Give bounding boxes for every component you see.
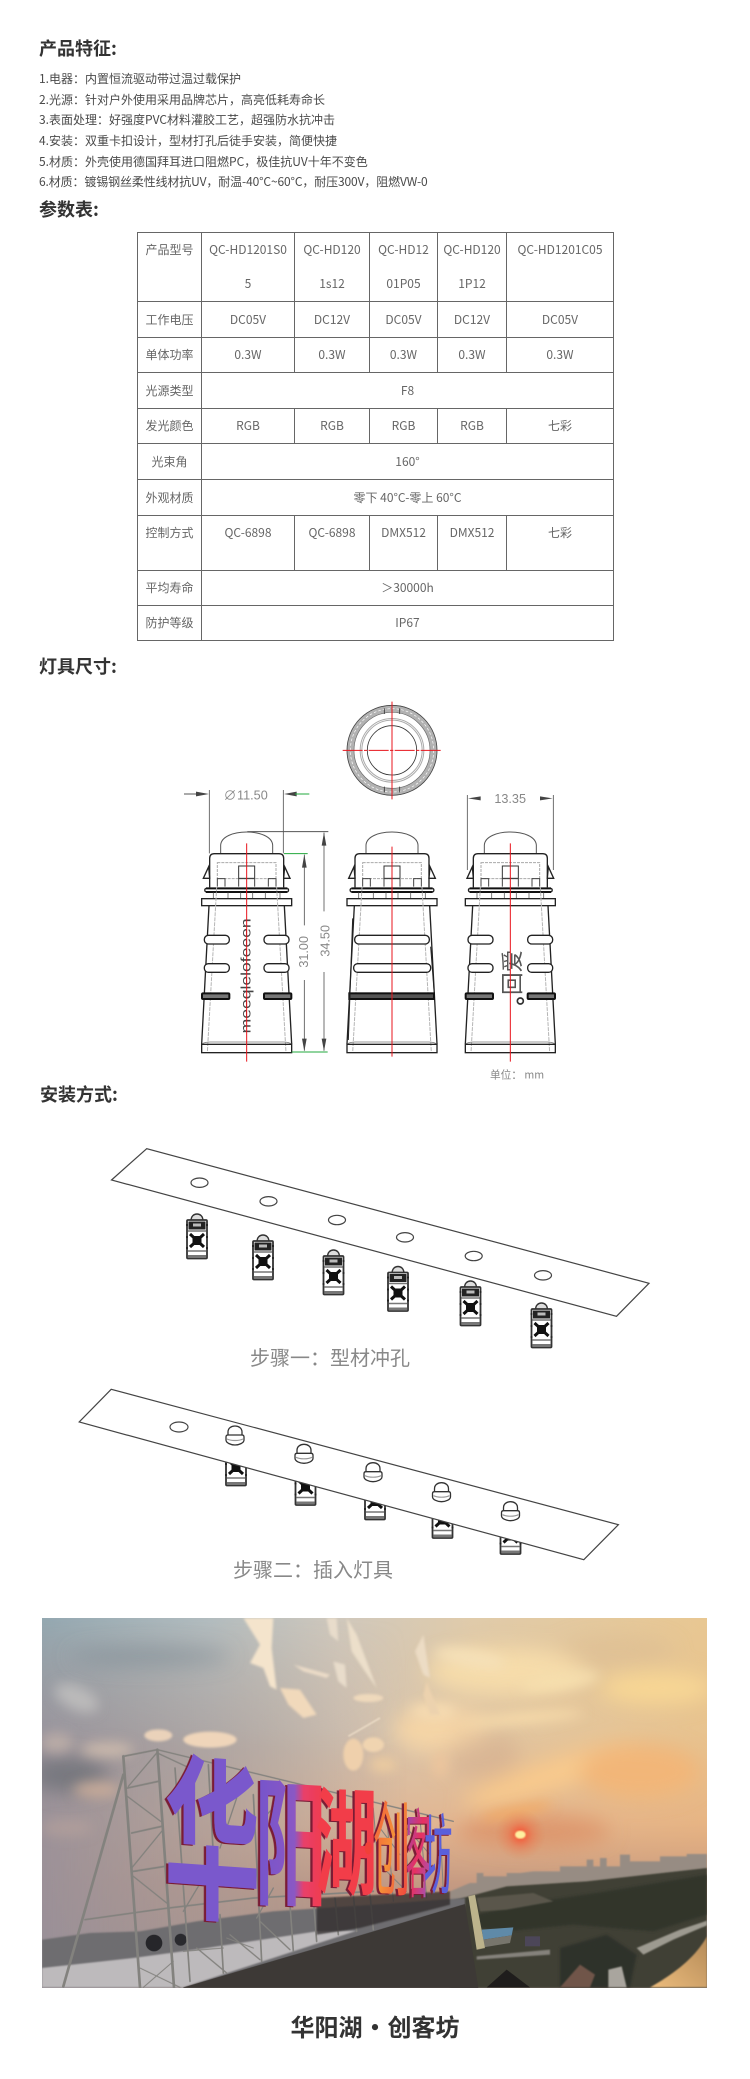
parameter table: DC05V — [385, 310, 422, 328]
feature list: 2.光源：针对户外使用采用品牌芯片，高亮低耗寿命长 — [39, 91, 325, 108]
parameter table: 光束角 — [151, 452, 188, 470]
right lamp elevation — [465, 832, 555, 1053]
parameter table: DC12V — [454, 310, 490, 328]
parameter table: 产品型号 — [145, 241, 194, 258]
sign lettering: 华阳湖·创客坊: 创 — [373, 1768, 410, 1918]
installation diagrams — [78, 1148, 650, 1560]
parameter table: 七彩 — [548, 524, 572, 541]
sign lettering: 华阳湖·创客坊: 湖 — [315, 1749, 377, 1920]
heading: 安装方式: 安装方式: — [40, 1081, 118, 1107]
dimension: width 13.35 — [467, 792, 553, 870]
parameter table: QC-6898 — [224, 524, 272, 541]
parameter table: 控制方式 — [145, 524, 194, 541]
parameter table: RGB — [320, 417, 344, 434]
sign lettering: 华阳湖·创客坊: 客 — [406, 1779, 431, 1918]
unit note: 单位： mm — [490, 1068, 544, 1083]
parameter table: RGB — [460, 417, 484, 434]
dimension: height 34.50 — [247, 832, 332, 1052]
contrail — [348, 1718, 380, 1736]
parameter table: 01P05 — [386, 275, 421, 292]
photo: illuminated sign at sunset — [42, 1618, 707, 1988]
parameter table: 工作电压 — [145, 310, 194, 328]
parameter table: DC12V — [314, 310, 350, 328]
step 2: open hole — [170, 1422, 188, 1432]
steel truss frame — [63, 1750, 453, 1987]
parameter table: 0.3W — [234, 346, 262, 363]
parameter table: 5 — [245, 275, 251, 292]
sign lettering: 华阳湖·创客坊: · — [355, 1810, 382, 1882]
step 2 label: 步骤二：插入灯具 — [233, 1554, 393, 1583]
red centre lines — [247, 843, 510, 1062]
step 1 label: 步骤一：型材冲孔 — [250, 1342, 410, 1371]
dimension: diameter 11.50 — [184, 789, 309, 853]
sign lettering: 华阳湖·创客坊: 阳 — [255, 1732, 327, 1938]
step 2: lamp bodies behind the profile — [225, 1441, 522, 1554]
parameter table: QC-HD120 — [303, 241, 361, 258]
sky — [42, 1618, 707, 1988]
parameter table: 1s12 — [319, 275, 345, 292]
parameter table: QC-6898 — [308, 524, 356, 541]
parameter table: 0.3W — [390, 346, 417, 363]
parameter table: 平均寿命 — [145, 579, 194, 596]
sign structure base — [317, 1891, 450, 1935]
heading: 灯具尺寸: 灯具尺寸: — [39, 653, 117, 679]
parameter table: QC-HD1201S0 — [209, 241, 287, 258]
dimension: height 31.00 — [284, 854, 311, 1051]
parameter table: RGB — [236, 417, 260, 434]
parameter table: QC-HD1201C05 — [518, 241, 602, 258]
dimension: height 31.00: 31.00 — [297, 936, 311, 968]
distant skyline — [450, 1854, 707, 1905]
parameter table: 160° — [395, 452, 420, 470]
parameter table: 七彩 — [548, 417, 572, 434]
sign lettering: 华阳湖·创客坊: 华 — [164, 1699, 261, 1961]
dimension: width 13.35: 13.35 — [494, 792, 526, 806]
parameter table: 发光颜色 — [145, 417, 194, 434]
ground and tree line — [450, 1868, 707, 1988]
dimension drawing — [184, 702, 556, 1083]
parameter table: DMX512 — [381, 524, 426, 541]
soft left clouds — [40, 1643, 601, 1836]
step 2: profile strip — [79, 1389, 618, 1560]
right lamp elevation: 回爱 — [495, 950, 528, 995]
parameter table: RGB — [392, 417, 415, 434]
sign lettering: 华阳湖·创客坊: 坊 — [424, 1786, 452, 1912]
parameter table: 防护等级 — [145, 614, 194, 631]
step 2: inserted lamp domes — [226, 1426, 520, 1521]
parameter table — [137, 232, 614, 641]
step 1: profile strip with punched holes — [112, 1149, 649, 1316]
large soft cloud masses — [28, 1636, 713, 1848]
feature list — [39, 70, 428, 190]
sun — [495, 1810, 545, 1860]
feature list: 3.表面处理：好强度PVC材料灌胶工艺，超强防水抗冲击 — [39, 111, 335, 128]
feature list: 4.安装：双重卡扣设计，型材打孔后徒手安装，简便快捷 — [39, 132, 337, 149]
step 1: lamps below the profile — [186, 1214, 552, 1348]
sign lettering: 华阳湖·创客坊 — [164, 1699, 452, 1961]
center lamp elevation — [347, 832, 437, 1053]
parameter table: 零下 40°C-零上 60°C — [353, 488, 462, 506]
far city and rooftop on left — [42, 1898, 465, 1987]
parameter table: F8 — [401, 382, 414, 398]
parameter table: DC05V — [230, 310, 266, 328]
parameter table: 外观材质 — [145, 488, 194, 506]
dimension: height 34.50: 34.50 — [318, 925, 332, 957]
left lamp elevation: meeqlelofeeen — [238, 918, 254, 1033]
parameter table: 0.3W — [458, 346, 486, 363]
feature list: 5.材质：外壳使用德国拜耳进口阻燃PC，极佳抗UV十年不变色 — [39, 153, 368, 170]
parameter table: ＞30000h — [381, 579, 434, 596]
caption: 华阳湖·创客坊: 华阳湖 · 创客坊 — [291, 2008, 459, 2043]
parameter table: 单体功率 — [145, 346, 194, 363]
dimension: diameter 11.50: 11.50 — [237, 789, 268, 803]
left lamp elevation — [202, 832, 292, 1053]
parameter table: 0.3W — [318, 346, 346, 363]
heading: 产品特征: 产品特征: — [39, 35, 117, 61]
defined clouds and streaks — [144, 1618, 440, 1771]
parameter table: DC05V — [542, 310, 578, 328]
parameter table: 光源类型 — [145, 382, 194, 398]
parameter table: 0.3W — [546, 346, 574, 363]
heading: 参数表: 参数表: — [39, 196, 99, 222]
parameter table: QC-HD12 — [378, 241, 429, 258]
building wall — [183, 1895, 485, 1988]
top view — [343, 702, 442, 799]
parameter table: 1P12 — [458, 275, 486, 292]
parameter table: IP67 — [395, 614, 420, 631]
parameter table: QC-HD120 — [443, 241, 501, 258]
feature list: 6.材质：镀锡钢丝柔性线材抗UV，耐温-40°C~60°C，耐压300V，阻燃VW-0 — [39, 173, 428, 190]
parameter table: DMX512 — [450, 524, 494, 541]
feature list: 1.电器：内置恒流驱动带过温过载保护 — [39, 70, 241, 87]
